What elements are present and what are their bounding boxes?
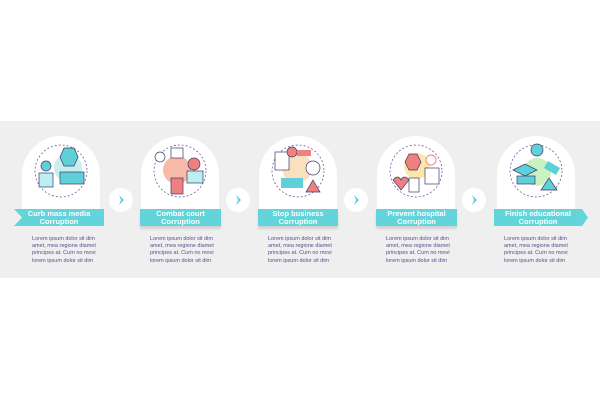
banner 3: Corruption [279, 216, 317, 226]
banner 1: Curb mass media [28, 209, 90, 218]
panel 4: hospital [377, 136, 455, 218]
icon: mass media [34, 144, 88, 198]
banner 2: Corruption [161, 216, 200, 226]
panel 3: business [259, 136, 337, 218]
arrow 1 [109, 188, 133, 212]
icon: court [154, 144, 206, 198]
background band [0, 121, 600, 278]
panel 1: mass media [22, 136, 100, 218]
banner 5 [494, 209, 588, 226]
banner 5: Finish educational [505, 209, 571, 218]
text 3: Lorem ipsum dolor sit dim amet, mea regione diamet principes at. Cum no movi lorem ipsum dolor sit dim [268, 236, 332, 264]
panel 5: education [497, 136, 575, 218]
text 4: Lorem ipsum dolor sit dim amet, mea regione diamet principes at. Cum no movi lorem ipsum dolor sit dim [386, 236, 450, 264]
icon: hospital [390, 144, 442, 198]
banner 3: Stop business [272, 209, 324, 218]
banner 3 [258, 209, 338, 226]
text 1: Lorem ipsum dolor sit dim amet, mea regione diamet principes at. Cum no movi lorem ipsum dolor sit dim [32, 236, 96, 264]
panel 2: court [141, 136, 219, 218]
arrow 3 [344, 188, 368, 212]
icon: education [510, 144, 562, 198]
text 2: Lorem ipsum dolor sit dim amet, mea regione diamet principes at. Cum no movi lorem ipsum dolor sit dim [150, 236, 214, 264]
text 5: Lorem ipsum dolor sit dim amet, mea regione diamet principes at. Cum no movi lorem ipsum dolor sit dim [504, 236, 568, 264]
banner 2 [140, 209, 221, 226]
banner 4: Prevent hospital [387, 209, 446, 218]
icon: business [272, 144, 324, 198]
banner 1 [14, 209, 104, 226]
banner 2: Combat court [156, 209, 205, 218]
banner 1: Corruption [40, 216, 78, 226]
banner 4 [376, 209, 457, 226]
banner 4: Corruption [397, 216, 436, 226]
arrow 4 [462, 188, 486, 212]
banner 5: Corruption [519, 216, 557, 226]
arrow 2 [226, 188, 250, 212]
